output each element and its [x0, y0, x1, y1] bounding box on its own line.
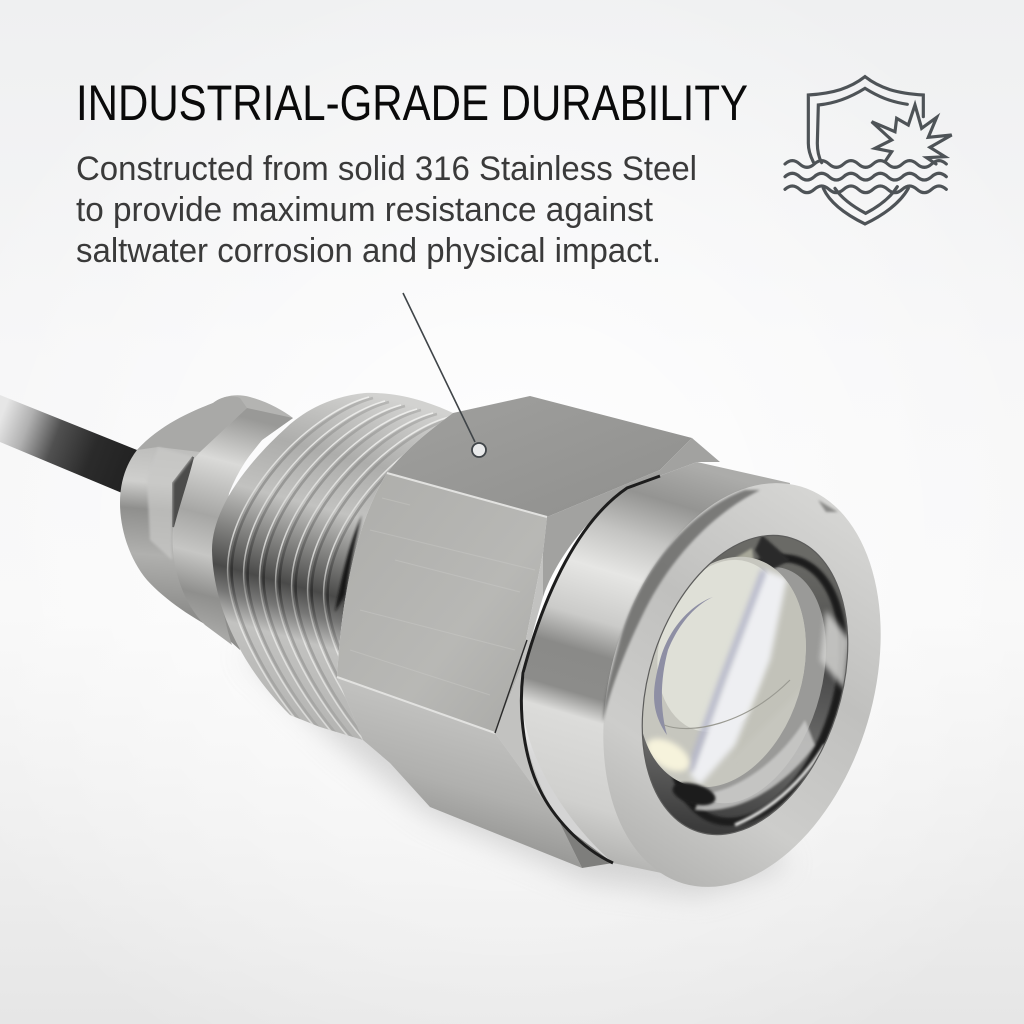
- lens: [642, 556, 806, 788]
- product: LED light: [120, 392, 881, 887]
- recess rim: [607, 509, 883, 861]
- description text: Constructed from solid 316 Stainless Steel: [76, 150, 697, 188]
- cylindrical collar: [522, 462, 790, 885]
- hex nut: top face: [387, 396, 692, 517]
- hex nut: right edge shadow: [495, 640, 527, 733]
- hex nut: lower face: [337, 677, 582, 868]
- collar seam: [521, 476, 660, 863]
- description text: [76, 150, 697, 270]
- ring chamfer shadow: [603, 490, 760, 722]
- front ring face: [558, 449, 926, 921]
- hex nut: front face: [337, 473, 547, 733]
- hex nut: lower right facet: [495, 553, 560, 823]
- contact shadow: [240, 650, 790, 895]
- rear gland nut: [120, 395, 293, 650]
- cable: [0, 395, 137, 493]
- hex nut: right facet: [543, 438, 720, 597]
- lens recess: [643, 536, 848, 834]
- title: INDUSTRIAL-GRADE DURABILITY: [76, 75, 748, 131]
- lens recess dark blob: [671, 780, 718, 808]
- callout dot: [472, 443, 486, 457]
- ring top scuff: [818, 500, 838, 512]
- hex nut: bottom chip: [560, 823, 613, 868]
- description text: to provide maximum resistance against: [76, 191, 654, 229]
- hex nut: edge highlights: [337, 473, 547, 733]
- icon: shield with impact and waves: [785, 77, 952, 224]
- callout leader line: [403, 293, 475, 442]
- description text: saltwater corrosion and physical impact.: [76, 232, 661, 270]
- threaded section: [212, 392, 453, 740]
- hex nut: brushed streaks: [350, 498, 535, 695]
